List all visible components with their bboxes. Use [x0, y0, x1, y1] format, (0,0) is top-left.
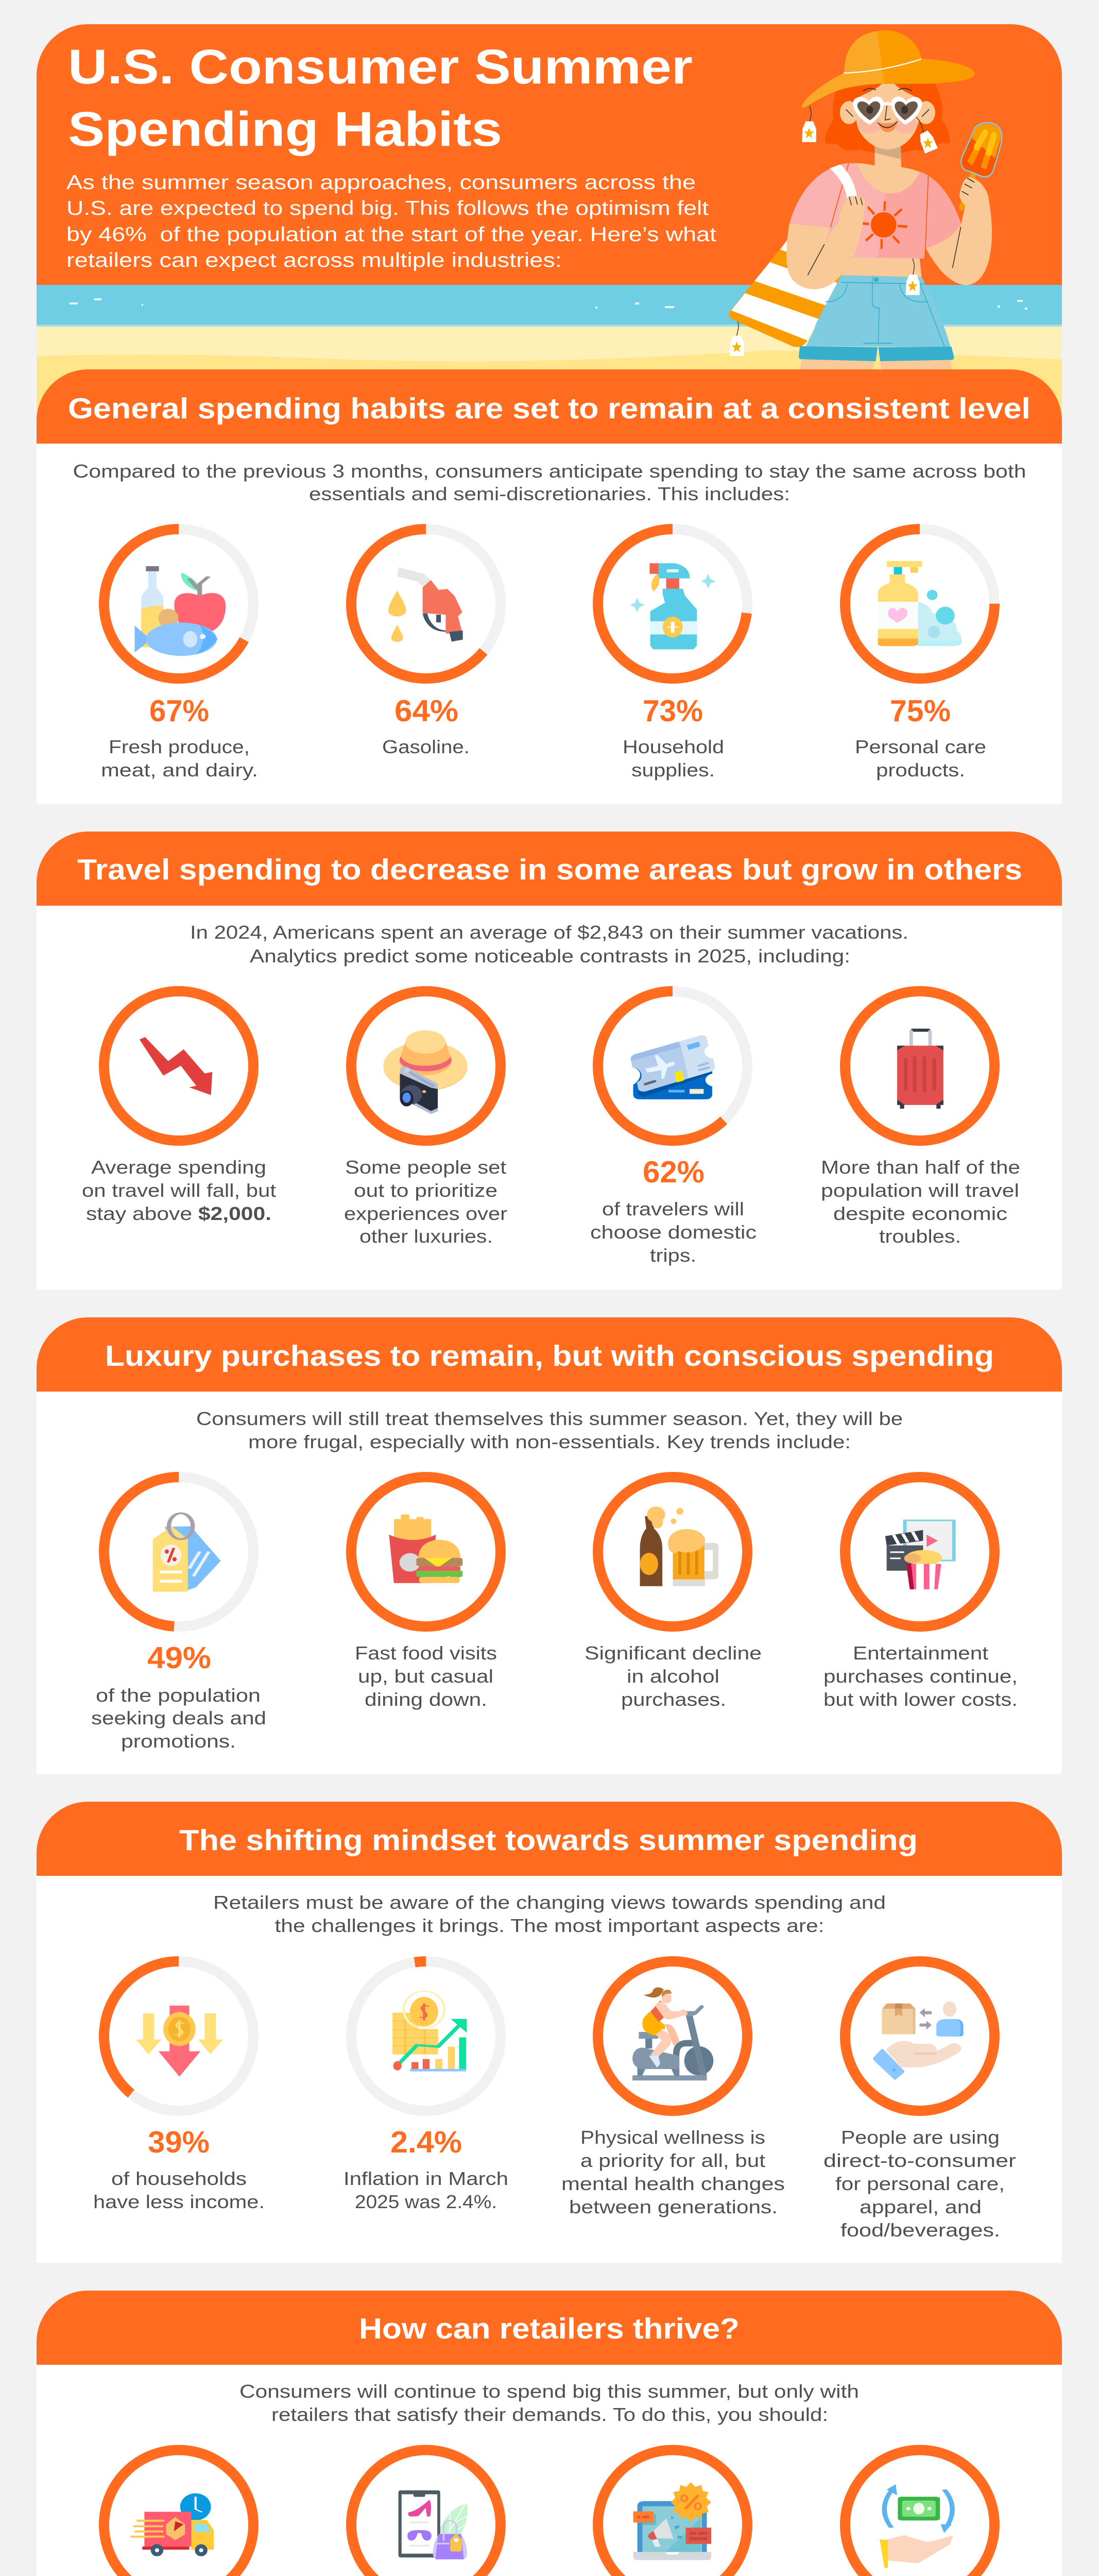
section intro [213, 1892, 886, 1936]
label: experiences over [344, 1203, 507, 1224]
title: Spending Habits [68, 102, 502, 157]
value: 49% [147, 1641, 211, 1675]
item: half will travel [821, 991, 1020, 1247]
label [355, 1642, 497, 1710]
ring full [845, 1477, 994, 1626]
intro text: by 46% of the population at the start of the year. Here’s what [66, 224, 716, 246]
hair [826, 84, 950, 153]
face [840, 84, 935, 149]
section header [37, 1317, 1062, 1392]
icon: fries and burger [389, 1515, 462, 1583]
label [344, 1157, 507, 1247]
section intro [190, 922, 908, 967]
item: promotions [596, 2450, 749, 2576]
section intro: Retailers must be aware of the changing views towards spending and [213, 1892, 886, 1913]
white panel background [37, 2360, 1062, 2576]
label: purchases. [621, 1689, 726, 1710]
heart sunglasses [853, 96, 922, 125]
section header [37, 1802, 1062, 1876]
label: Average spending [91, 1157, 266, 1178]
label: People are using [841, 2127, 1000, 2148]
label: direct-to-consumer [823, 2150, 1016, 2171]
label: Fresh produce, [109, 736, 250, 757]
white panel background [37, 1386, 1062, 1774]
label [585, 1642, 762, 1710]
label: Gasoline. [382, 736, 470, 757]
label: a priority for all, but [580, 2150, 765, 2171]
icon: clapperboard and popcorn [885, 1520, 954, 1589]
icon: beer bottle and mug [640, 1506, 718, 1586]
label [91, 1685, 266, 1752]
section intro [239, 2381, 859, 2425]
label: Inflation in March [344, 2168, 508, 2189]
label [823, 2127, 1016, 2241]
value: 62% [643, 1155, 705, 1189]
label: meat, and dairy. [101, 759, 258, 781]
section intro: Consumers will continue to spend big this summer, but only with [239, 2381, 859, 2402]
label [344, 2168, 508, 2212]
illustration: woman in sun hat holding popsicle [729, 30, 1002, 370]
label: supplies. [631, 759, 715, 781]
label [101, 736, 258, 781]
section intro [73, 461, 1026, 504]
label [823, 1642, 1018, 1710]
item: repayment plans [829, 2450, 1013, 2576]
icon: downward arrows and coin [136, 2006, 223, 2077]
item: household supplies 73% [598, 529, 747, 781]
item: households 39% [93, 1961, 265, 2212]
label: Some people set [345, 1157, 506, 1178]
label: seeking deals and [91, 1707, 266, 1728]
label [93, 2168, 265, 2212]
label: products. [876, 759, 965, 781]
section intro: essentials and semi-discretionaries. This includes: [309, 483, 790, 504]
item: personal care 75% [845, 529, 994, 781]
label: stay above $2,000. [86, 1203, 271, 1224]
beach bag [729, 240, 843, 347]
icon: spray bottle [630, 563, 716, 649]
item: gasoline 64% [351, 529, 501, 757]
label: out to prioritize [354, 1180, 497, 1201]
legs [800, 359, 952, 370]
section intro: Consumers will still treat themselves this summer season. Yet, they will be [196, 1408, 903, 1429]
label [821, 1157, 1020, 1247]
label: mental health changes [561, 2173, 785, 2194]
ring chart 73% [598, 529, 747, 679]
icon: hat and camera [383, 1030, 468, 1114]
sun hat [802, 30, 974, 108]
label: Household [623, 736, 724, 757]
section header: Luxury purchases to remain, but with conscious spending [105, 1340, 994, 1372]
icon: soap pump bottle [878, 561, 962, 646]
section header [37, 369, 1062, 444]
value: 39% [148, 2125, 210, 2159]
ring chart 39% [104, 1961, 253, 2111]
section header: Travel spending to decrease in some areas but grow in others [77, 853, 1022, 886]
label: apparel, and [860, 2196, 982, 2217]
intro text: retailers can expect across multiple industries: [66, 249, 562, 272]
label: purchases continue, [823, 1666, 1018, 1687]
icon: boarding pass and ticket [631, 1035, 715, 1099]
label: Significant decline [585, 1642, 762, 1664]
section header [37, 832, 1062, 906]
icon: woman on exercise bike [632, 1987, 713, 2080]
ring full [845, 991, 994, 1141]
label: other luxuries. [359, 1226, 493, 1247]
section intro: the challenges it brings. The most important aspects are: [275, 1915, 824, 1936]
right arm [926, 177, 992, 285]
label: promotions. [121, 1731, 236, 1752]
value: 2.4% [390, 2125, 462, 2159]
ring full [598, 1961, 747, 2111]
label: Personal care [855, 736, 986, 757]
label: of the population [96, 1685, 261, 1706]
value: 75% [890, 694, 951, 728]
title: U.S. Consumer Summer [68, 40, 693, 94]
label: of travelers will [602, 1198, 744, 1219]
icon: suitcase [897, 1029, 943, 1109]
panel: travel spending [37, 832, 1062, 1290]
icon: coins and growth chart [392, 1991, 467, 2072]
item: direct to consumer [823, 1961, 1016, 2241]
beach scene [37, 285, 1062, 430]
title [68, 40, 693, 157]
label [590, 1198, 757, 1266]
label: Physical wellness is [580, 2127, 765, 2148]
popsicle [961, 123, 1002, 177]
ring chart 62% [598, 991, 747, 1141]
panel: hero [37, 24, 1062, 430]
item: fast food [351, 1477, 501, 1710]
ring full [598, 1477, 747, 1626]
label: for personal care, [835, 2173, 1005, 2194]
label: population will travel [821, 1180, 1019, 1201]
label: despite economic [833, 1203, 1007, 1224]
intro text: U.S. are expected to spend big. This follows the optimism felt [66, 197, 709, 219]
section intro: retailers that satisfy their demands. To do this, you should: [271, 2404, 828, 2425]
label [623, 736, 724, 781]
icon: money and hand [880, 2484, 953, 2568]
ring full [351, 991, 501, 1141]
section header: General spending habits are set to remain at a consistent level [68, 392, 1031, 425]
label [855, 736, 986, 781]
ring chart 67% [104, 529, 253, 679]
ring chart 75% [845, 529, 994, 679]
item: social shopping [337, 2450, 516, 2576]
neck [874, 146, 901, 169]
label: troubles. [879, 1226, 961, 1247]
label [82, 1157, 276, 1224]
item: inflation 2.4% [344, 1961, 508, 2212]
item: wellness [561, 1961, 785, 2217]
ring full [845, 2450, 994, 2576]
ring chart 49% [104, 1477, 253, 1626]
value: 67% [149, 694, 209, 728]
left arm and hand [786, 178, 974, 289]
label: but with lower costs. [823, 1689, 1018, 1710]
intro text [66, 172, 716, 272]
icon: fuel nozzle [388, 567, 463, 642]
item: deals 49% [91, 1477, 266, 1752]
section intro [196, 1408, 903, 1452]
icon: box, person and hand [873, 2002, 963, 2080]
midriff [841, 258, 922, 277]
ring full [104, 2450, 253, 2576]
icon: bottle, apple and fish [135, 566, 226, 656]
section header: How can retailers thrive? [359, 2312, 740, 2345]
label: on travel will fall, but [82, 1180, 276, 1201]
label: of households [111, 2168, 247, 2189]
ring chart 64% [351, 529, 501, 679]
label: choose domestic [590, 1222, 757, 1243]
item: fresh produce 67% [101, 529, 258, 781]
price tags [730, 106, 938, 356]
hero orange background [37, 24, 1062, 289]
ring full [598, 2450, 747, 2576]
intro text: As the summer season approaches, consumers across the [66, 172, 696, 194]
label: trips. [650, 1245, 696, 1266]
section header: The shifting mindset towards summer spending [179, 1824, 918, 1857]
label: between generations. [569, 2196, 778, 2217]
icon: phone and shopping bag [399, 2490, 468, 2560]
label [561, 2127, 785, 2217]
ring full [351, 1477, 501, 1626]
ring chart 2.4% [351, 1961, 501, 2111]
label: food/beverages. [840, 2219, 1000, 2241]
item: average spending falls [82, 991, 276, 1224]
panel: shifting mindset [37, 1802, 1062, 2263]
white panel background [37, 1870, 1062, 2263]
icon: delivery truck [130, 2493, 214, 2556]
popsicle stick [962, 175, 973, 208]
icon: laptop, megaphone and discount badge [633, 2482, 711, 2560]
panel: luxury purchases [37, 1317, 1062, 1774]
white panel background [37, 902, 1062, 1290]
section header [37, 2291, 1062, 2365]
item: prioritize experiences [344, 991, 507, 1247]
section intro: Compared to the previous 3 months, consumers anticipate spending to stay the same across both [73, 461, 1026, 482]
section intro: In 2024, Americans spent an average of $2,843 on their summer vacations. [190, 922, 908, 943]
icon: falling arrow [140, 1037, 212, 1095]
section intro: Analytics predict some noticeable contrasts in 2025, including: [250, 945, 850, 967]
icon: price tags [153, 1513, 221, 1592]
ring full [104, 991, 253, 1141]
panel: how can retailers thrive [37, 2291, 1062, 2576]
white panel background [37, 438, 1062, 804]
label: dining down. [365, 1689, 487, 1710]
label: have less income. [93, 2191, 265, 2212]
label: Entertainment [853, 1642, 988, 1664]
panel: general spending habits [37, 369, 1062, 804]
ring full [351, 2450, 501, 2576]
bag strap [830, 164, 857, 198]
label: 2025 was 2.4%. [355, 2191, 497, 2212]
value: 73% [643, 694, 703, 728]
item: secure payments and shipping [66, 2450, 291, 2576]
shorts [799, 275, 954, 361]
label: up, but casual [358, 1666, 493, 1687]
section intro: more frugal, especially with non-essentials. Key trends include: [248, 1431, 851, 1452]
pink shirt with sun [789, 163, 961, 259]
label: More than half of the [821, 1157, 1020, 1178]
value: 64% [394, 694, 458, 728]
ring full [845, 1961, 994, 2111]
item: domestic trips 62% [590, 991, 757, 1266]
item: entertainment [823, 1477, 1018, 1710]
label: in alcohol [627, 1666, 719, 1687]
label: Fast food visits [355, 1642, 497, 1664]
item: alcohol decline [585, 1477, 762, 1710]
